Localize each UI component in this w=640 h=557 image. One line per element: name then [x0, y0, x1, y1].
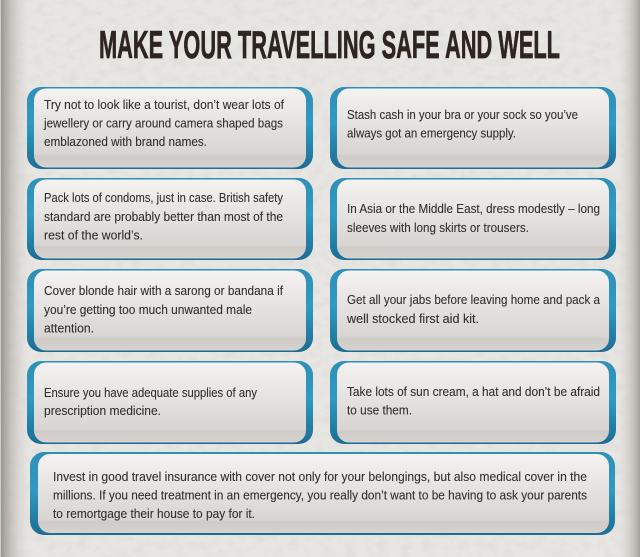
panel: pack condoms — [27, 178, 313, 260]
panel: look like a tourist: Try not to look like a tourist, don’t wear lots of — [44, 98, 284, 112]
panel: travel insurance: to remortgage their house to pay for it. — [53, 507, 255, 521]
panel: dress modestly: In Asia or the Middle East, dress modestly – long — [347, 202, 600, 216]
panel: prescription medicine: prescription medicine. — [44, 404, 161, 418]
panel: stash cash: always got an emergency supply. — [347, 126, 516, 140]
panel: prescription medicine — [27, 361, 313, 444]
panel: pack condoms: standard are probably better than most of the — [44, 210, 283, 224]
panel: jabs and first aid: Get all your jabs before leaving home and pack a — [347, 293, 600, 307]
panel: dress modestly: sleeves with long skirts or trousers. — [347, 221, 529, 235]
panel: pack condoms: rest of the world’s. — [44, 228, 143, 242]
panel: cover blonde hair: you’re getting too much unwanted male — [44, 303, 252, 317]
panel: jabs and first aid: well stocked first aid kit. — [346, 312, 479, 326]
panel: travel insurance: Invest in good travel insurance with cover not only for your belongings, but also medical cover in the — [53, 470, 587, 484]
panel: jabs and first aid — [330, 269, 616, 352]
panel: cover blonde hair — [27, 269, 313, 352]
panel: stash cash — [330, 87, 616, 169]
panel: stash cash: Stash cash in your bra or your sock so you’ve — [347, 108, 578, 122]
panel: dress modestly — [330, 178, 616, 260]
panel: pack condoms: Pack lots of condoms, just in case. British safety — [44, 191, 284, 205]
panel: look like a tourist: emblazoned with brand names. — [44, 135, 207, 149]
panel: look like a tourist: jewellery or carry around camera shaped bags — [43, 116, 283, 130]
panel: prescription medicine: Ensure you have adequate supplies of any — [44, 386, 258, 400]
panel: cover blonde hair: attention. — [44, 322, 94, 336]
panel: look like a tourist — [27, 87, 313, 169]
panel: sun cream — [330, 361, 616, 444]
panel: sun cream: to use them. — [347, 404, 412, 418]
panel: cover blonde hair: Cover blonde hair with a sarong or bandana if — [44, 284, 283, 298]
panel: sun cream: Take lots of sun cream, a hat and don’t be afraid — [347, 385, 600, 399]
panel: travel insurance: millions. If you need treatment in an emergency, you really don’t want to be having to ask your parents — [53, 488, 587, 502]
panel: travel insurance — [30, 452, 615, 535]
